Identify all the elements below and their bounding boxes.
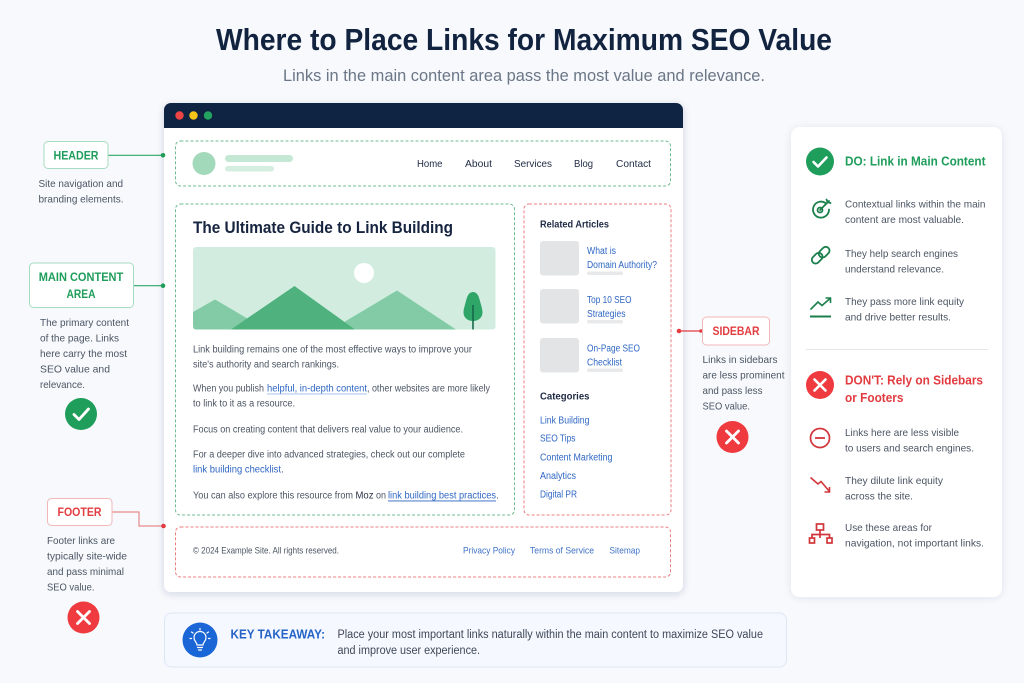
article text: Link building remains one of the most effective ways to improve your	[193, 344, 473, 356]
footer region: Terms of Service	[530, 546, 594, 556]
don't item: sitemap	[810, 522, 984, 550]
related articles: What is	[587, 246, 616, 257]
categories	[540, 392, 612, 500]
callout: sidebar	[677, 317, 785, 453]
header region: About	[465, 158, 492, 170]
article text	[193, 344, 499, 502]
related articles: On-Page SEO	[587, 344, 640, 354]
article text: For a deeper dive into advanced strategies, check out our complete	[193, 450, 465, 460]
callout: main content area: The primary content	[40, 317, 129, 329]
callout: sidebar: SIDEBAR	[712, 326, 760, 338]
categories: Categories	[540, 392, 590, 402]
categories: Content Marketing	[540, 452, 612, 464]
do item: trend: and drive better results.	[845, 312, 951, 324]
don't heading	[806, 371, 983, 405]
do item: contextual: content are most valuable.	[845, 214, 964, 226]
callout: sidebar: SEO value.	[702, 400, 750, 412]
callout: main content area: here carry the most	[40, 348, 127, 360]
don't item: dilute: across the site.	[845, 490, 913, 502]
subtitle: Links in the main content area pass the most value and relevance.	[283, 67, 765, 85]
do heading: DO: Link in Main Content	[845, 154, 986, 168]
callout: header	[38, 142, 165, 206]
hero illustration	[193, 247, 496, 330]
categories: Digital PR	[540, 490, 577, 500]
panel: browser window mockup	[164, 103, 683, 592]
icon: light bulb	[182, 622, 218, 658]
key takeaway: KEY TAKEAWAY:	[230, 628, 325, 642]
related articles: Related Articles	[540, 220, 609, 230]
article heading: The Ultimate Guide to Link Building	[193, 218, 453, 237]
article text: link building checklist	[193, 464, 281, 476]
callout: main content area: of the page. Links	[40, 332, 119, 344]
related articles: Strategies	[587, 309, 626, 320]
key takeaway: and improve user experience.	[338, 645, 480, 657]
icon: check	[65, 398, 97, 430]
do heading	[806, 148, 986, 176]
browser title bar	[164, 103, 683, 128]
callout: footer: typically site-wide	[47, 550, 127, 562]
sidebar region	[524, 204, 671, 515]
do item: trend: They pass more link equity	[845, 296, 965, 308]
callout: footer: FOOTER	[58, 507, 102, 519]
callout: header: branding elements.	[38, 194, 124, 206]
don't item: sitemap: Use these areas for	[845, 522, 932, 534]
do item: contextual: Contextual links within the main	[845, 198, 986, 210]
do item: link	[810, 245, 958, 276]
callout: header: Site navigation and	[38, 178, 123, 190]
key takeaway	[164, 613, 786, 667]
do item: contextual	[813, 198, 986, 226]
don't item: dilute: They dilute link equity	[845, 475, 944, 487]
header region: Services	[514, 158, 552, 170]
callout: main content area: SEO value and	[40, 364, 110, 376]
related articles: Domain Authority?	[587, 260, 657, 271]
callout: footer: and pass minimal	[47, 566, 124, 578]
article text: When you publish	[193, 384, 264, 394]
article text: to link to it as a resource.	[193, 398, 295, 410]
panel: do and don't	[791, 127, 1002, 597]
article text: Focus on creating content that delivers real value to your audience.	[193, 424, 463, 436]
don't heading: DON'T: Rely on Sidebars	[845, 372, 983, 388]
callout: footer: Footer links are	[47, 535, 115, 547]
header region: Blog	[574, 158, 593, 170]
icon: cross	[68, 602, 100, 634]
callout: sidebar: are less prominent	[702, 370, 785, 382]
don't item: less visible: to users and search engines.	[845, 442, 974, 454]
header region	[176, 141, 670, 186]
article text: helpful, in-depth content	[267, 384, 367, 394]
article text: site's authority and search rankings.	[193, 360, 339, 370]
callout: sidebar: Links in sidebars	[702, 354, 778, 366]
title: Where to Place Links for Maximum SEO Value	[216, 22, 832, 57]
footer region	[176, 527, 670, 577]
callout: footer: SEO value.	[47, 582, 94, 594]
callout: main content area	[30, 263, 165, 430]
article text: .	[281, 464, 284, 476]
do item: link: They help search engines	[845, 248, 958, 260]
related articles: Top 10 SEO	[587, 295, 632, 306]
do item: trend	[810, 296, 965, 324]
footer region: Sitemap	[610, 546, 640, 556]
article text: You can also explore this resource from	[193, 490, 353, 502]
categories: SEO Tips	[540, 434, 576, 444]
don't heading: or Footers	[845, 390, 904, 405]
don't item: dilute	[810, 475, 944, 502]
callout: sidebar: and pass less	[702, 385, 762, 397]
key takeaway: Place your most important links naturally within the main content to maximize SEO value	[338, 629, 763, 641]
don't item: less visible	[810, 427, 974, 454]
main content region	[176, 204, 514, 515]
article text: on	[376, 490, 386, 502]
callout: header: HEADER	[54, 150, 99, 162]
callout: footer	[47, 498, 166, 634]
article text: link building best practices	[388, 490, 496, 502]
don't item: sitemap: navigation, not important links.	[845, 538, 984, 550]
article text: Moz	[356, 490, 374, 502]
categories: Link Building	[540, 416, 590, 426]
icon: cross	[716, 421, 748, 453]
callout: main content area: relevance.	[40, 379, 85, 391]
callout: main content area: MAIN CONTENT	[39, 272, 123, 284]
callout: main content area: AREA	[66, 289, 96, 301]
categories: Analytics	[540, 471, 576, 482]
related articles	[540, 220, 657, 372]
header region: Home	[417, 158, 443, 170]
do item: link: understand relevance.	[845, 264, 944, 276]
footer region: Privacy Policy	[463, 546, 515, 556]
article text: , other websites are more likely	[367, 384, 490, 394]
don't item: less visible: Links here are less visible	[845, 427, 959, 439]
footer region: © 2024 Example Site. All rights reserved.	[193, 546, 339, 556]
article text: .	[496, 490, 499, 502]
related articles: Checklist	[587, 358, 622, 368]
header region: Contact	[616, 158, 651, 170]
